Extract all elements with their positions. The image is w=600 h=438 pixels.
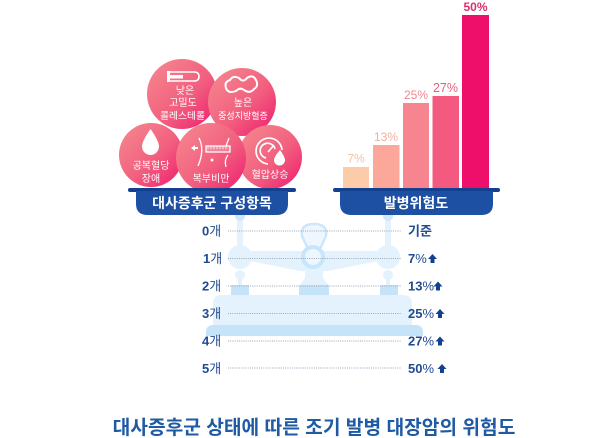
row labels: count: 2개 — [202, 278, 221, 294]
row labels: count: 3개 — [202, 306, 221, 321]
circle: low HDL cholesterol: 콜레스테롤 — [160, 110, 205, 122]
row labels: count: 4개 — [202, 334, 221, 348]
table: component count versus risk — [202, 224, 446, 376]
icon: test tube — [167, 71, 199, 82]
circle: abdominal obesity: 복부비만 — [193, 173, 229, 185]
circle: high blood pressure: 혈압상승 — [252, 168, 288, 181]
bar 50% — [462, 0, 489, 188]
bar 25%: 25% — [404, 88, 428, 102]
bar 13%: 13% — [374, 130, 398, 144]
tray: components label: 대사증후군 구성항목 — [152, 195, 272, 211]
row values: risk — [408, 224, 434, 376]
row labels: count: 1개 — [203, 251, 222, 266]
row labels: count: 0개 — [202, 224, 221, 238]
circle: high triglycerides — [208, 68, 276, 136]
circle: impaired fasting glucose — [119, 123, 183, 187]
tray: risk label — [333, 188, 500, 215]
bar 50%: 50% — [463, 0, 488, 14]
row values: risk: 7% — [408, 251, 427, 266]
circle: high triglycerides: 중성지방혈증 — [218, 110, 268, 121]
bar 7%: 7% — [347, 152, 365, 166]
balance scale illustration — [206, 211, 423, 336]
circle: abdominal obesity — [176, 123, 246, 193]
row values: risk: 기준 — [408, 224, 432, 238]
row values: risk: 25% — [408, 306, 434, 321]
circle: low HDL cholesterol: 고밀도 — [169, 97, 197, 109]
circle: impaired fasting glucose: 장애 — [142, 173, 160, 185]
bar chart: disease risk — [333, 0, 500, 215]
circle: high blood pressure — [238, 125, 302, 189]
icon: pressure gauge — [256, 138, 285, 166]
icons: up arrows — [428, 254, 446, 373]
circle: impaired fasting glucose: 공복혈당 — [133, 159, 169, 172]
icon: fat cloud — [226, 76, 257, 92]
circle: low HDL cholesterol: 낮은 — [176, 85, 194, 97]
bar 7% — [343, 152, 369, 188]
bar 27% — [432, 81, 459, 188]
icon: waist and tape measure — [191, 138, 230, 167]
row labels: count — [202, 224, 222, 376]
bar 25% — [403, 88, 429, 188]
panel: metabolic syndrome components — [119, 59, 302, 215]
bar 13% — [373, 130, 400, 188]
bar 27%: 27% — [433, 81, 458, 95]
row labels: count: 5개 — [202, 361, 221, 376]
row values: risk: 50% — [408, 361, 434, 376]
icon: blood drop — [142, 129, 159, 155]
circle: high triglycerides: 높은 — [234, 97, 252, 109]
circle: low HDL cholesterol — [147, 59, 217, 129]
row values: risk: 13% — [408, 278, 434, 294]
row values: risk: 27% — [408, 334, 434, 348]
tray: components label — [128, 188, 296, 215]
tray: risk label: 발병위험도 — [384, 195, 448, 211]
